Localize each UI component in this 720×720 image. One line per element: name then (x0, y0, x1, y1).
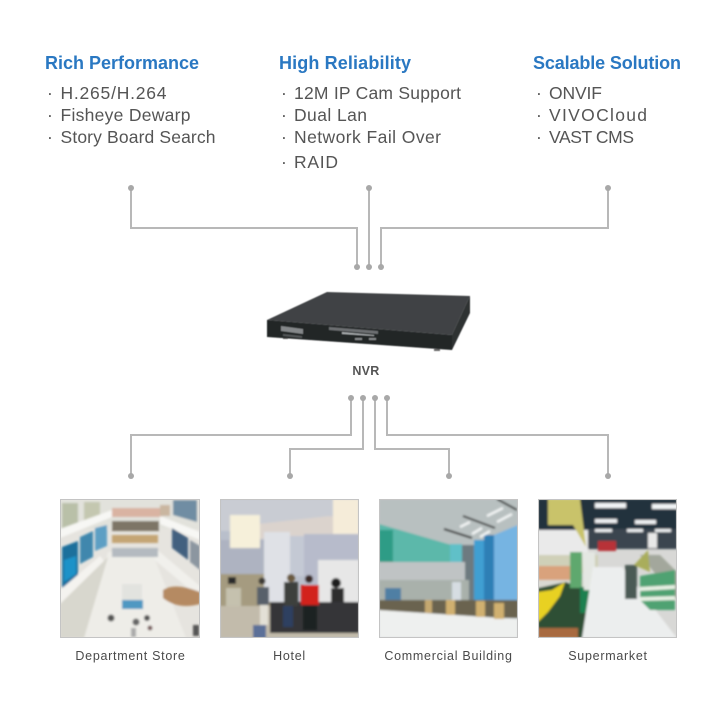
feature list: Scalable Solution: · (536, 105, 542, 125)
column: Scalable Solution (533, 53, 681, 147)
feature list: High Reliability: · (281, 83, 287, 103)
feature list: Scalable Solution: · (536, 83, 542, 103)
feature list: High Reliability: 12M IP Cam Support (294, 83, 461, 103)
photo: hotel lobby (220, 499, 359, 638)
label: NVR: NVR (352, 364, 380, 378)
feature list: Rich Performance: H.265/H.264 (60, 83, 167, 103)
caption: Commercial Building: Commercial Building (384, 649, 513, 663)
feature list: High Reliability: · (281, 152, 287, 172)
photo: department store atrium (60, 499, 200, 638)
caption: Department Store: Department Store (75, 649, 186, 663)
feature list: Rich Performance: · (47, 83, 53, 103)
caption: Supermarket: Supermarket (568, 649, 648, 663)
icon: NVR device (267, 292, 470, 351)
feature list: High Reliability: · (281, 127, 287, 147)
feature list: Rich Performance: · (47, 105, 53, 125)
heading: High Reliability: High Reliability (279, 53, 411, 73)
feature list: High Reliability: · (281, 105, 287, 125)
caption: Hotel: Hotel (273, 649, 306, 663)
feature list: Rich Performance: · (47, 127, 53, 147)
feature list: Scalable Solution: ONVIF (549, 83, 602, 103)
feature list: High Reliability: Dual Lan (294, 105, 367, 125)
connectors: features to NVR (128, 185, 611, 270)
feature list: Scalable Solution: · (536, 127, 542, 147)
photo: supermarket aisle (538, 499, 677, 638)
feature list: Rich Performance: Story Board Search (60, 127, 216, 147)
feature list: High Reliability: Network Fail Over (294, 127, 441, 147)
photo: commercial building lobby (379, 499, 518, 638)
feature list: High Reliability: RAID (294, 152, 338, 172)
column: Rich Performance (45, 53, 216, 147)
column: High Reliability (279, 53, 461, 172)
feature list: Scalable Solution: VIVOCloud (549, 105, 647, 125)
feature list: Scalable Solution: VAST CMS (549, 127, 634, 147)
heading: Rich Performance: Rich Performance (45, 53, 199, 73)
feature list: Rich Performance: Fisheye Dewarp (60, 105, 190, 125)
connectors: NVR to applications (128, 395, 611, 479)
heading: Scalable Solution: Scalable Solution (533, 53, 681, 73)
photo frames (60, 500, 676, 638)
